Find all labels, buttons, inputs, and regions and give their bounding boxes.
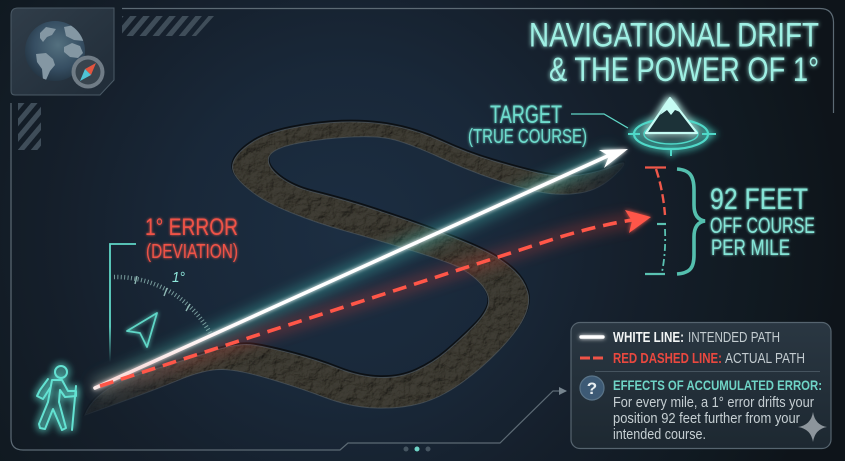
error label: (DEVIATION): [146, 241, 238, 263]
icon: globe: [25, 21, 85, 81]
deviation bracket: [645, 168, 666, 274]
icon: question mark: [580, 376, 604, 400]
error label: [145, 214, 238, 263]
true north bracket: [110, 244, 136, 362]
hatch stripes: top: [122, 16, 214, 36]
target leader line: [571, 114, 628, 128]
target label: TARGET: [490, 101, 562, 129]
angle gauge: 1°: [172, 269, 185, 286]
icon: compass: [72, 56, 104, 88]
error label: 1° ERROR: [145, 214, 238, 241]
white line: intended path: [95, 149, 628, 388]
icon panel: globe and compass: [11, 8, 114, 95]
effects text block: intended course.: [613, 427, 706, 443]
effects text block: For every mile, a 1° error drifts your: [613, 395, 814, 411]
drift measurement text: 92 FEET: [710, 183, 808, 216]
target label: (TRUE COURSE): [468, 126, 587, 148]
icon: question mark: ?: [587, 379, 597, 398]
title: [529, 16, 819, 89]
icon: navigation arrow: [127, 313, 157, 347]
hatch stripes: left: [18, 103, 41, 150]
legend: white line key: [581, 330, 780, 346]
drift measurement text: [710, 183, 815, 260]
target label: [468, 101, 587, 148]
effects text block: position 92 feet further from your: [613, 411, 800, 427]
red dashed line: actual path: [95, 210, 651, 388]
curly brace: [677, 169, 705, 274]
legend: red dashed key: [580, 351, 805, 367]
legend: red dashed key: RED DASHED LINE:: [613, 351, 722, 367]
legend: white line key: WHITE LINE:: [613, 330, 684, 346]
arrowhead: red: [625, 210, 651, 233]
effects text block: [613, 377, 822, 443]
icon: target mountain: [628, 98, 716, 156]
angle gauge: [114, 269, 210, 333]
drift measurement text: PER MILE: [711, 235, 790, 260]
icon: hiker: [37, 366, 76, 430]
legend: white line key: INTENDED PATH: [688, 330, 780, 346]
legend panel: [571, 322, 831, 448]
pagination dots: [404, 446, 430, 452]
icon: sparkle: [798, 412, 827, 442]
arrowhead: white: [599, 149, 628, 168]
winding road: [85, 121, 624, 415]
legend: red dashed key: ACTUAL PATH: [725, 351, 805, 367]
connector arrowhead: [559, 387, 567, 395]
